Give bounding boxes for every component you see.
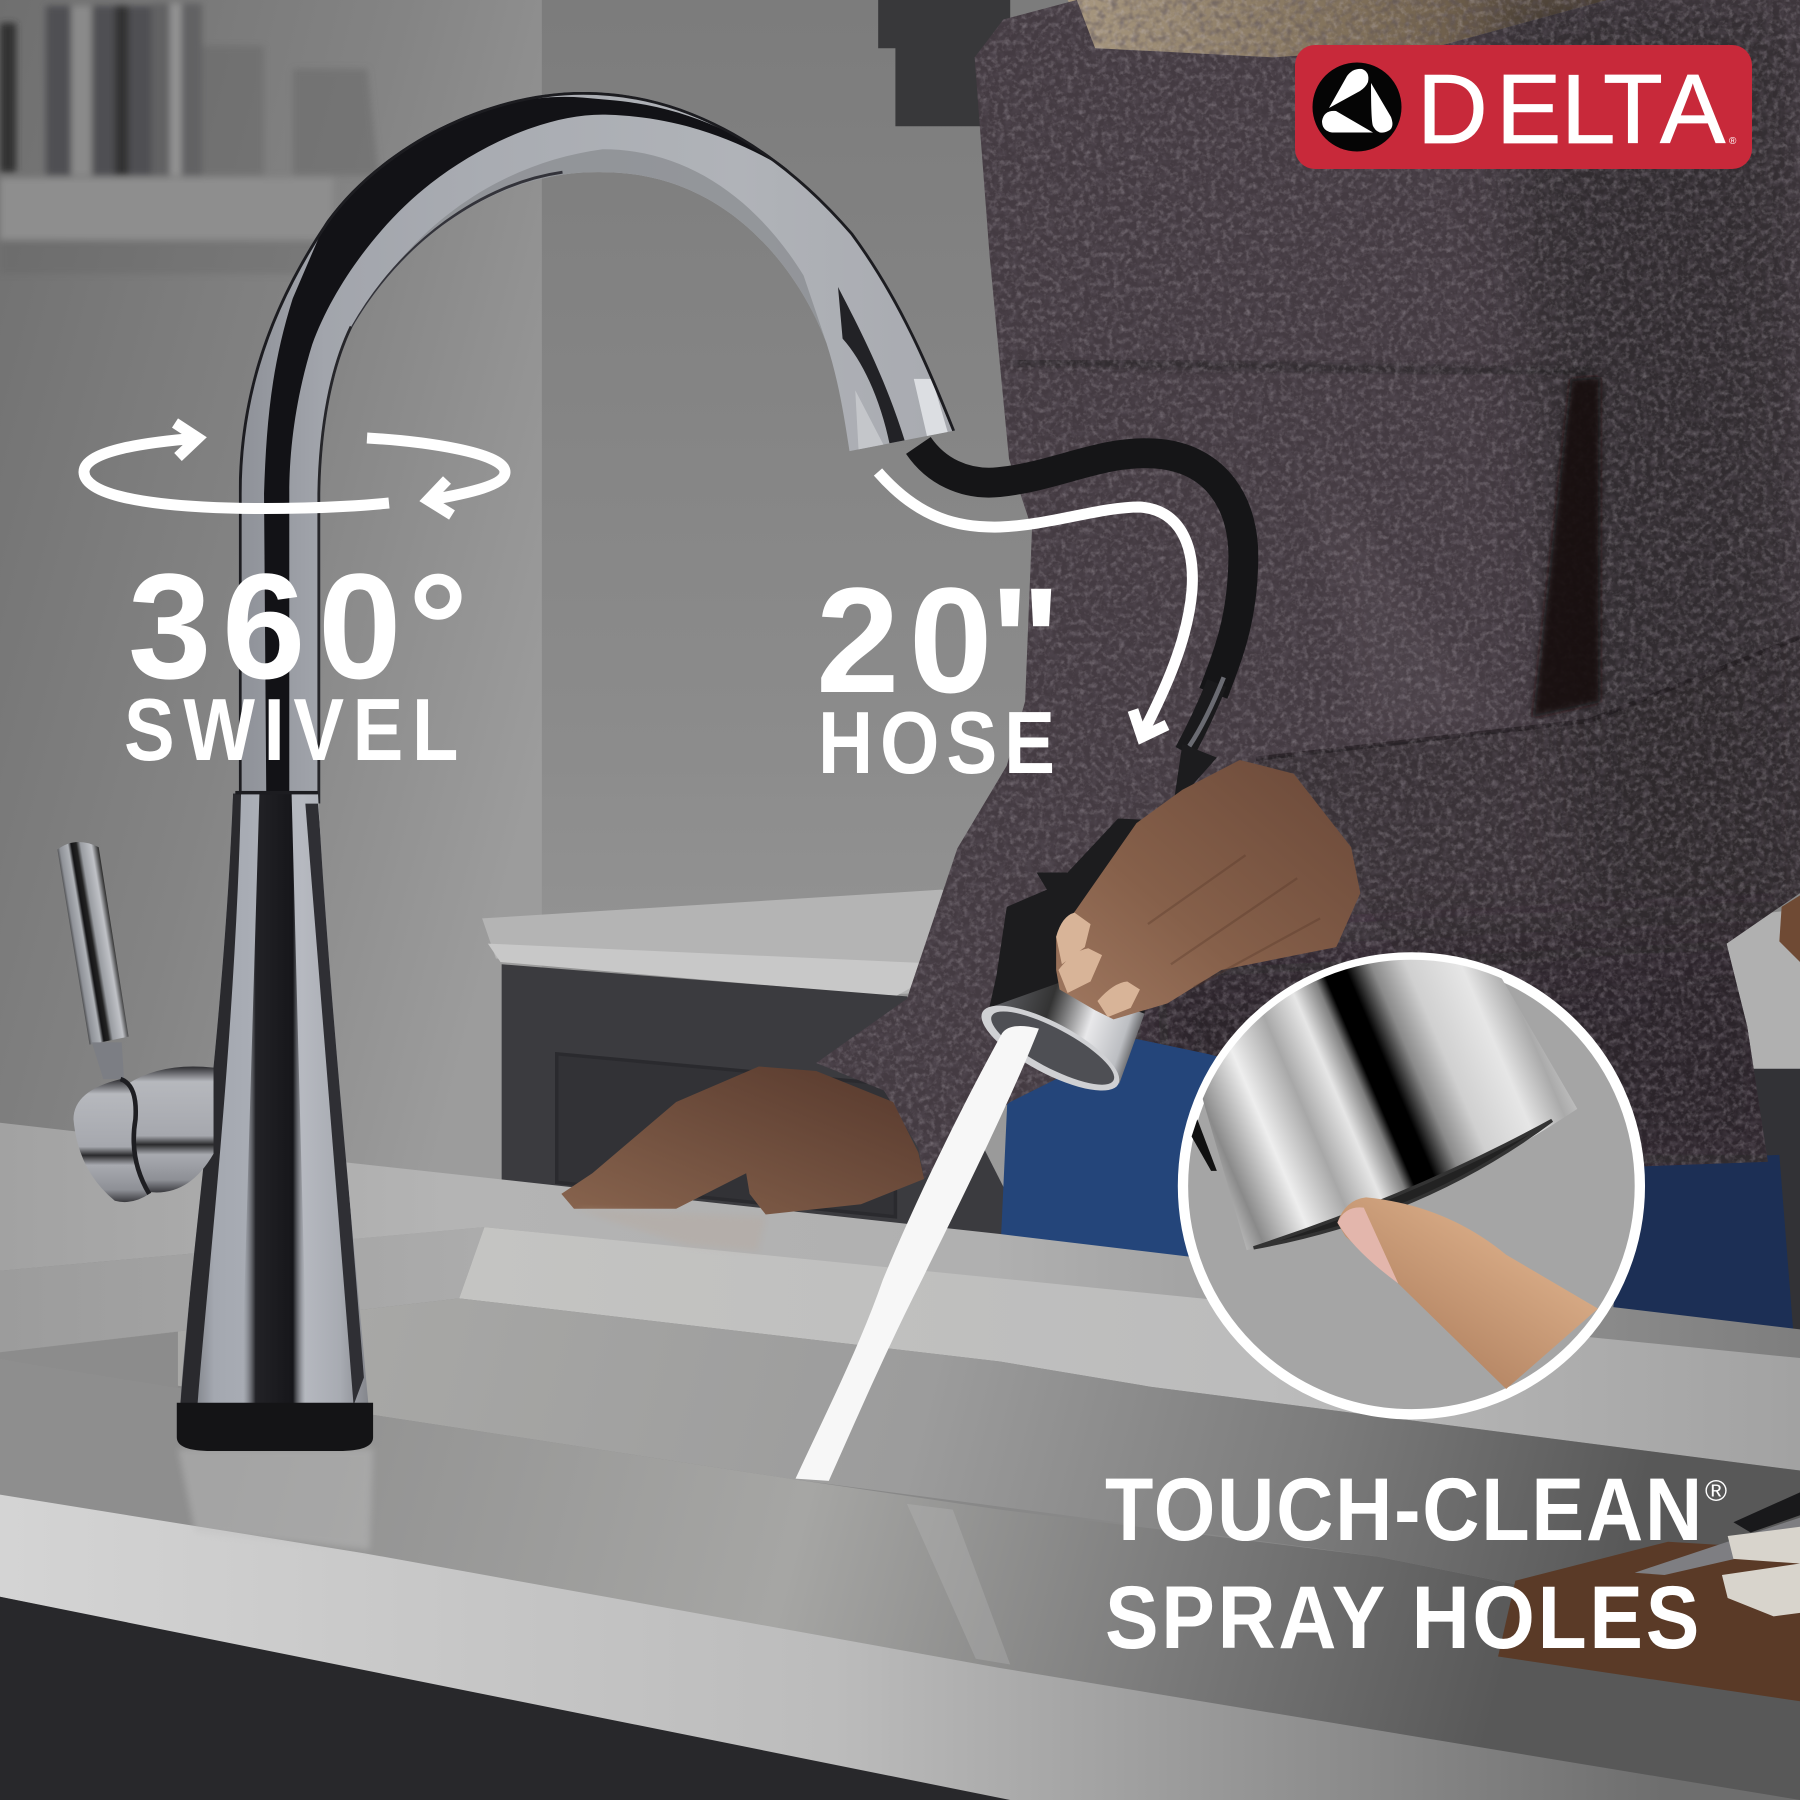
spray head chrome [992,983,1145,1084]
heading: swivel: SWIVEL [124,680,467,779]
left hand on counter [561,1066,924,1215]
back counter and cabinet [482,890,1800,1337]
water stream [796,1026,1039,1481]
chrome spray head closeup [1202,960,1578,1250]
registered mark: ® [1705,1475,1727,1508]
logo mark [1312,62,1402,152]
heading: 360 degrees: 360° [128,542,468,710]
faucet [57,92,955,1451]
arrow: hose reach [878,472,1192,737]
hand reflection [574,1209,766,1251]
sweater [804,0,1800,1182]
right hand edge at frame [1779,895,1800,962]
wall shelf with jars [0,3,379,274]
jeans [1001,1039,1793,1329]
spray wand dark pieces [990,744,1217,1014]
faucet reflection [178,1449,373,1550]
handle [57,842,214,1202]
hose [918,445,1243,752]
faucet base [177,1403,373,1451]
registered mark: ® [1729,136,1737,147]
heading: hose: HOSE [818,693,1062,792]
heading: 20 inch: 20" [816,556,1061,724]
kitchen counter and sink [0,1123,1800,1800]
spray head face [971,990,1130,1106]
back walls [0,0,1116,1263]
fingertip [1337,1197,1598,1389]
heading: spray holes: SPRAY HOLES [1105,1567,1702,1667]
hand [1056,760,1360,1019]
logo: Delta [1295,45,1752,169]
faucet gooseneck [239,92,955,804]
icon: swivel rotation arrows [84,423,505,515]
faucet collar line [235,791,318,794]
heading: touch-clean: TOUCH-CLEAN [1105,1459,1704,1559]
neck and skin [1068,0,1607,57]
spray head and right hand [971,744,1360,1106]
dark upper cabinet [878,0,1010,126]
callout circle: touch-clean detail [1178,952,1645,1420]
faucet cone body [180,793,368,1405]
logo wordmark: DELTA [1417,54,1726,164]
cutting board with knife and vegetables [1498,1492,1800,1701]
